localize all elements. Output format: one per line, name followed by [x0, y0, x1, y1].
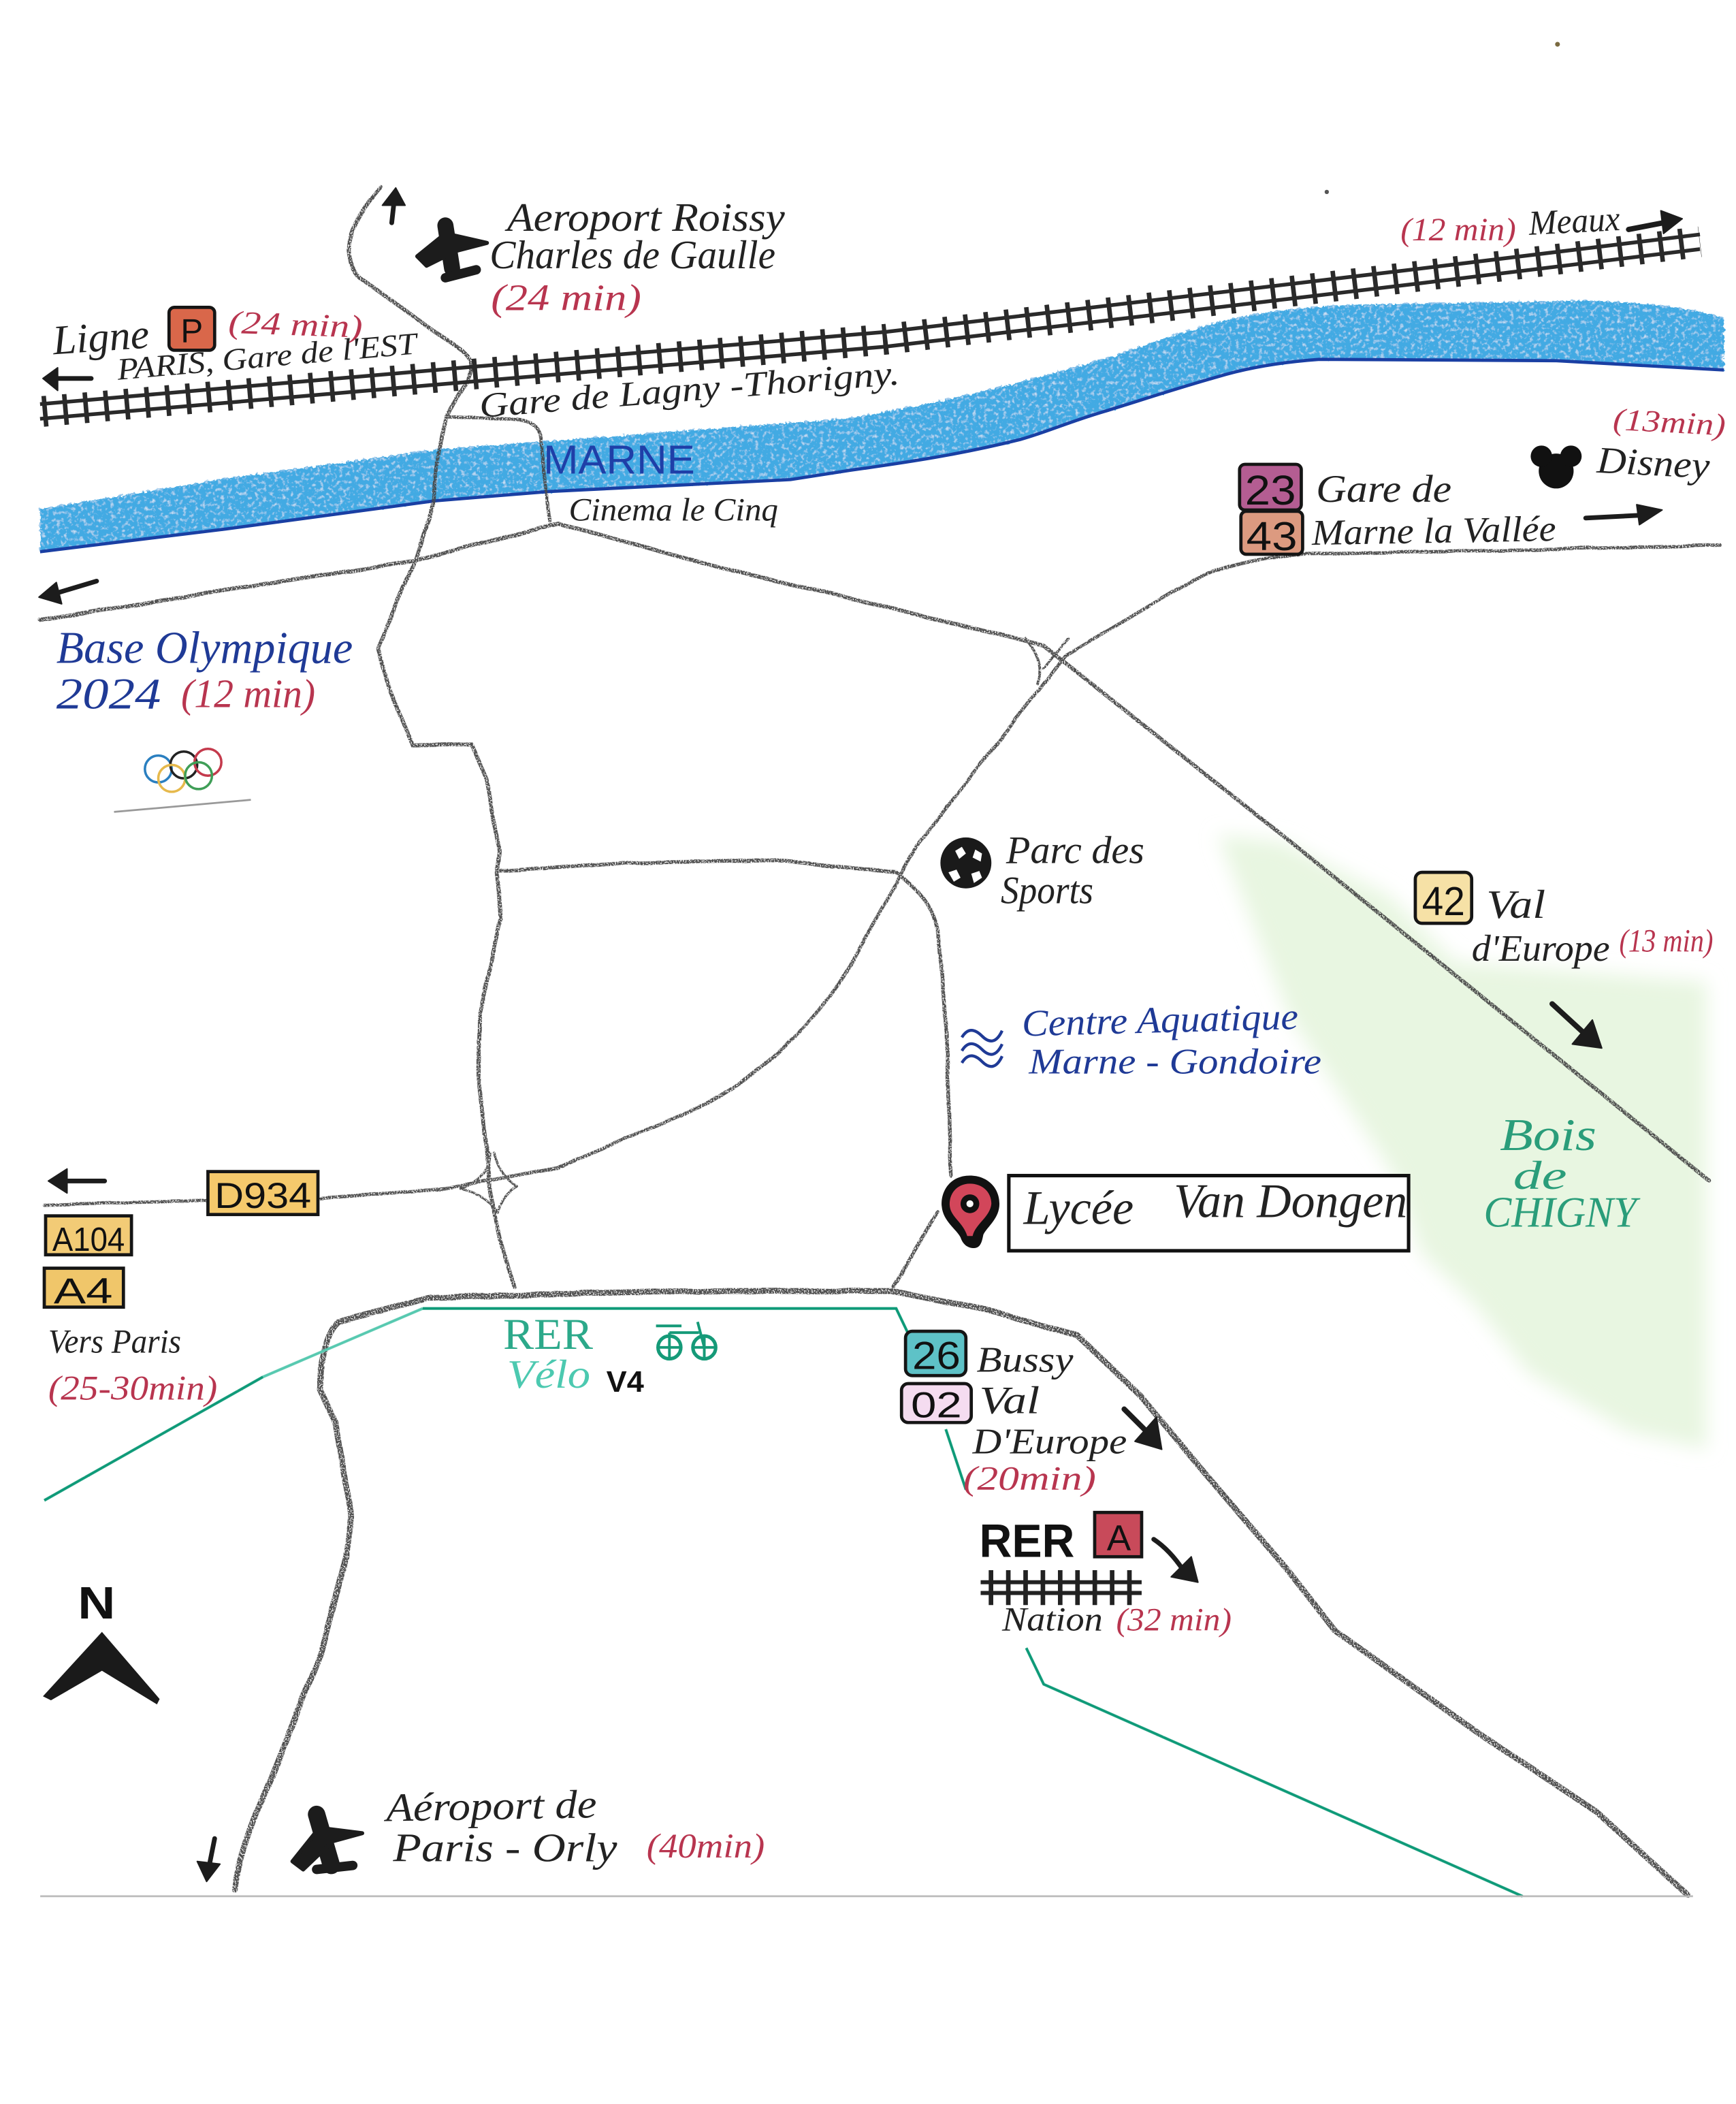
label: Disney 13 min: (13min) [1612, 402, 1726, 442]
label: bus 26/02 Bussy Val d'Europe: D'Europe [972, 1422, 1127, 1462]
label: A104 A4 vers Paris: Vers Paris [48, 1323, 181, 1360]
label: RER Vélo V4: RER [503, 1310, 594, 1359]
label: Gare de Lagny-Thorigny: Gare de Lagny -Thorigny. [478, 354, 901, 426]
label: Aéroport de Paris-Orly [293, 1781, 765, 1870]
text: Aéroport Roissy: Aeroport Roissy [504, 195, 786, 240]
label: Ligne P: (24 min) [228, 305, 363, 345]
badge: A [1095, 1512, 1142, 1558]
label: Base Olympique 2024: Base Olympique [57, 623, 353, 673]
icon: RER track [980, 1582, 1143, 1593]
label: Base Olympique 2024: 2024 [57, 670, 161, 719]
badge: D934: D934 [214, 1176, 311, 1216]
label: RER A Nation: Nation [1001, 1601, 1103, 1638]
label: RER Vélo V4: V4 [607, 1366, 644, 1399]
label: Bois de Chigny: Bois [1500, 1110, 1596, 1160]
arrow east Meaux [1628, 210, 1682, 234]
badge: 42 [1415, 872, 1472, 924]
label: Centre Aquatique Marne-Gondoire: Marne - Gondoire [1028, 1042, 1321, 1082]
arrow southeast Val d'Europe [1552, 1004, 1602, 1048]
icon: location pin [942, 1176, 999, 1248]
road network [40, 187, 1720, 1895]
label: bus 26/02 Bussy Val d'Europe: (20min) [963, 1460, 1096, 1497]
label: bus 26/02 Bussy Val d'Europe [901, 1331, 1127, 1497]
badge: 02: 02 [911, 1385, 962, 1425]
label: A104 A4 vers Paris: (25-30min) [48, 1369, 217, 1408]
icon: bicycle [656, 1322, 716, 1359]
label: Aéroport de Paris-Orly: Paris - Orly [392, 1826, 617, 1870]
label: RER A Nation [980, 1512, 1232, 1638]
label: Lycée Van Dongen: Lycée [1023, 1181, 1134, 1234]
label: Bois de Chigny: de [1513, 1153, 1567, 1198]
label: Lycée Van Dongen: Van Dongen [1174, 1175, 1407, 1228]
label: Base Olympique 2024 [57, 623, 353, 719]
label: Lycée Van Dongen [1009, 1175, 1409, 1251]
railway line [40, 234, 1700, 419]
arrow southeast Bussy [1124, 1409, 1162, 1450]
icon: Olympic rings [114, 749, 251, 812]
badge: 26 [905, 1331, 966, 1377]
label: Aéroport Roissy Charles de Gaulle [417, 195, 786, 318]
label: Base Olympique 2024: (12 min) [181, 671, 315, 716]
badge: A4: A4 [54, 1271, 113, 1311]
river Marne [40, 300, 1724, 552]
arrow west Base Olympique [39, 581, 97, 604]
label: Centre Aquatique Marne-Gondoire: Centre Aquatique [1021, 995, 1299, 1045]
north arrow: N [78, 1578, 115, 1629]
arrow southeast RER [1154, 1540, 1198, 1582]
icon: Mickey [1530, 445, 1581, 488]
label: Aéroport de Paris-Orly: Aéroport de [383, 1781, 597, 1830]
label: bus 23/43 Gare de Marne la Vallée: Marne la Vallée [1311, 509, 1556, 553]
label: bus 26/02 Bussy Val d'Europe: Bussy [977, 1339, 1074, 1380]
icon: ball [940, 838, 991, 889]
label: Disney 13 min: Disney [1595, 439, 1711, 486]
label: bus 42 Val d'Europe [1415, 872, 1713, 969]
badge: P [169, 307, 214, 350]
arrow west D934 [48, 1169, 105, 1193]
label: Ligne P [50, 305, 420, 387]
forest area: Bois de Chigny [1218, 835, 1707, 1450]
label: Disney 13 min [1530, 402, 1726, 525]
label: RER A Nation: (32 min) [1116, 1603, 1232, 1638]
label: Meaux 12 min: Meaux [1527, 200, 1621, 243]
badge: 43 [1241, 511, 1302, 559]
badge: A4 [44, 1269, 123, 1311]
badge: 43: 43 [1247, 513, 1298, 559]
label: Parc des Sports: Sports [1001, 869, 1093, 912]
label: Ligne P: PARIS, Gare de l'EST [115, 326, 420, 387]
label: Parc des Sports: Parc des [1006, 829, 1144, 872]
label: Bois de Chigny [1483, 1110, 1641, 1236]
label: bus 42 Val d'Europe: d'Europe [1472, 927, 1610, 969]
label: RER A Nation: RER [980, 1514, 1074, 1567]
label: Parc des Sports [940, 829, 1144, 912]
badge: 02 [901, 1384, 971, 1425]
label: bus 26/02 Bussy Val d'Europe: Val [980, 1379, 1040, 1422]
label: Centre Aquatique Marne-Gondoire [962, 995, 1321, 1082]
badge: A104: A104 [52, 1221, 125, 1258]
RER Vélo cycle path [44, 1309, 1523, 1896]
label: A104 A4 vers Paris [44, 1216, 217, 1408]
label: bus 23/43 Gare de Marne la Vallée [1240, 464, 1556, 559]
label: Bois de Chigny: CHIGNY [1483, 1188, 1641, 1236]
label: Meaux 12 min [1400, 200, 1682, 248]
label: bus 42 Val d'Europe: (13 min) [1619, 923, 1713, 959]
arrow north to CDG [383, 188, 405, 223]
label: bus 23/43 Gare de Marne la Vallée: Gare de [1316, 468, 1451, 511]
label: Cinéma le Cinq: Cinema le Cinq [569, 493, 778, 528]
label: bus 42 Val d'Europe: Val [1486, 882, 1545, 927]
label: Marne: MARNE [543, 437, 695, 483]
bottom edge line [40, 1896, 1693, 1897]
label: RER Vélo V4: Vélo [507, 1352, 590, 1397]
badge: 42: 42 [1422, 878, 1465, 924]
label: Aéroport de Paris-Orly: (40min) [647, 1827, 765, 1866]
arrow south Orly [197, 1838, 220, 1881]
label: RER Vélo V4 [503, 1310, 716, 1399]
arrow east Disney [1586, 505, 1662, 525]
label: Aéroport Roissy Charles de Gaulle: Charles de Gaulle [489, 232, 775, 277]
badge: 26: 26 [912, 1334, 961, 1377]
arrow west Paris Est [43, 368, 91, 391]
icon: plane CDG [417, 225, 487, 278]
label: Aéroport Roissy Charles de Gaulle: (24 min) [491, 276, 641, 318]
badge: A: A [1107, 1518, 1131, 1558]
label: Meaux 12 min: (12 min) [1400, 212, 1516, 248]
badge: 23: 23 [1245, 467, 1296, 513]
icon: waves [962, 1030, 1002, 1066]
badge: P: P [180, 313, 203, 350]
icon: plane Orly [293, 1815, 362, 1870]
north arrow [43, 1578, 159, 1704]
label: Ligne P: Ligne [50, 312, 150, 364]
